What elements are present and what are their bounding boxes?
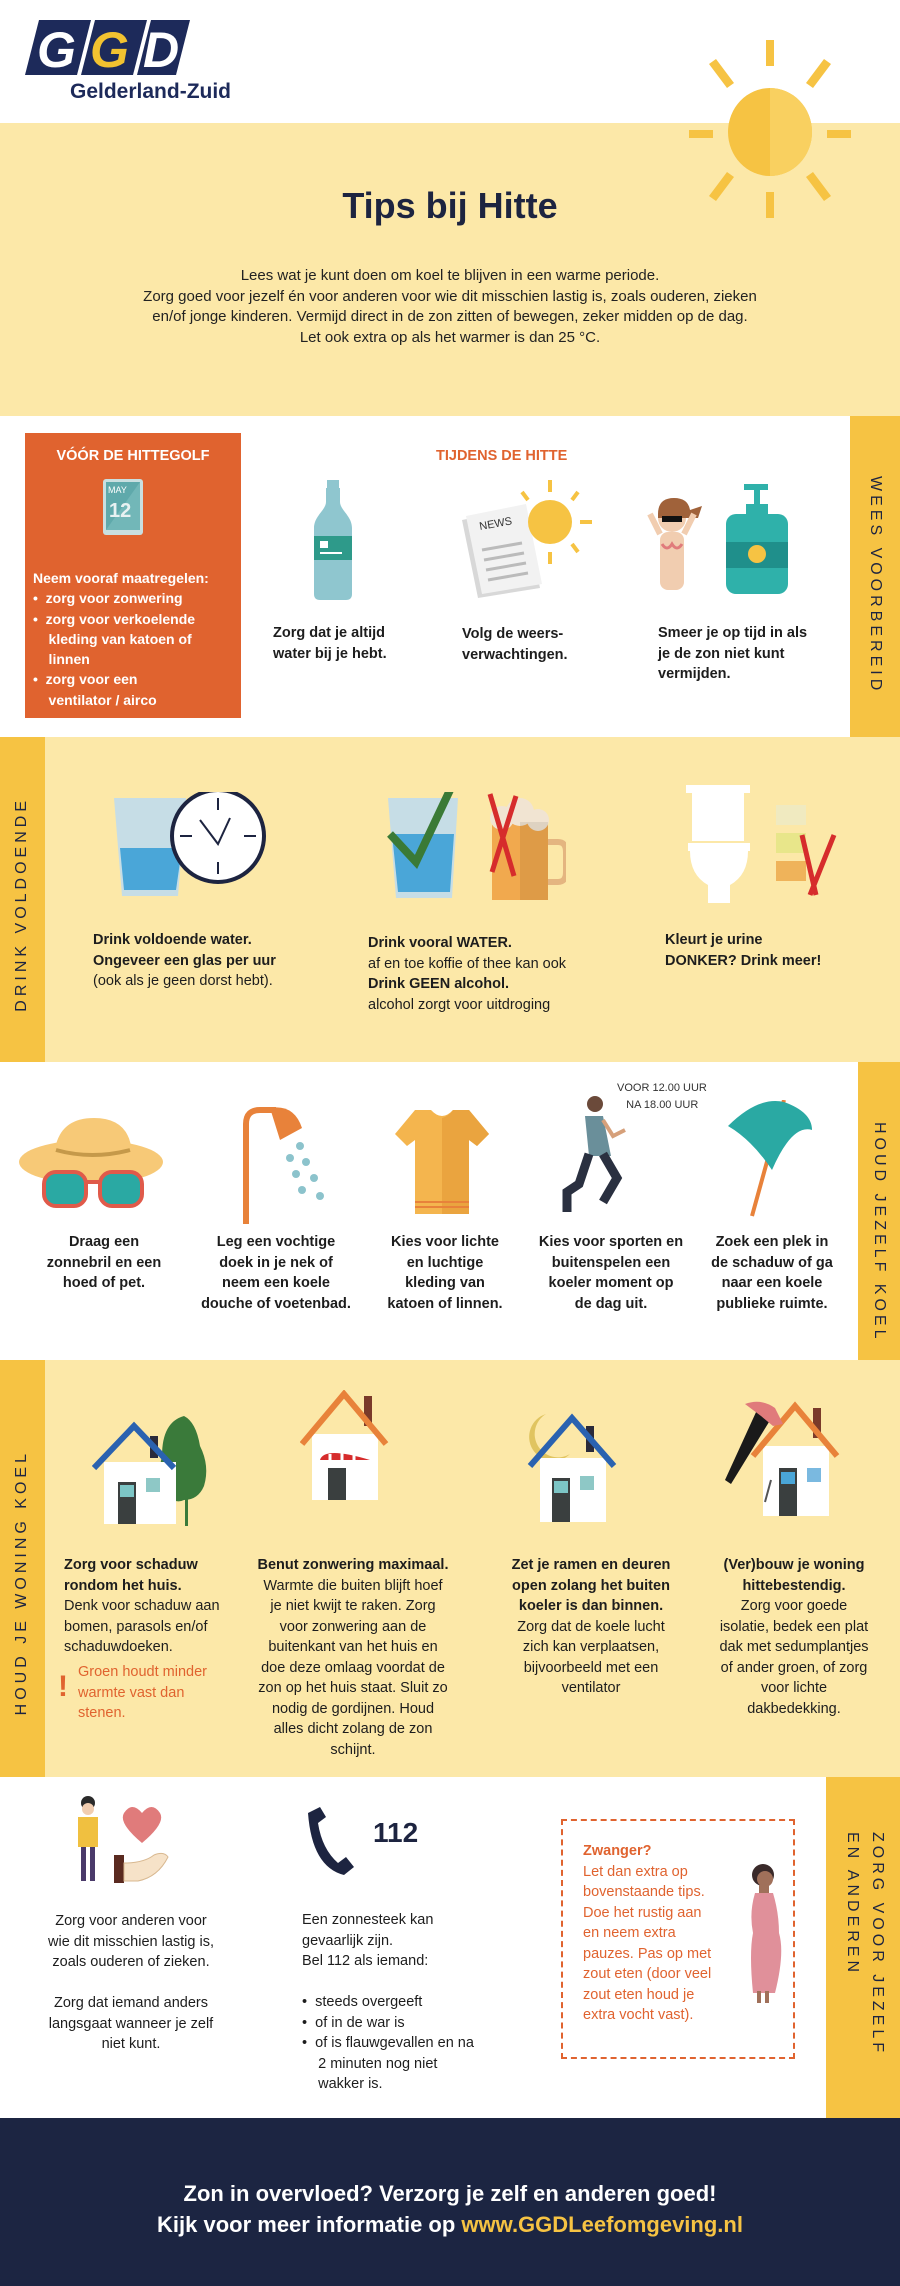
caption: kleding: katoen of linnen. — [387, 1296, 503, 1312]
caption: zonwering: je niet kwijt te raken. Zorg — [270, 1598, 436, 1614]
caption: glas per uur: Ongeveer een glas per uur — [93, 952, 276, 968]
side bar: drink voldoende: DRINK VOLDOENDE — [13, 797, 30, 1012]
caption: verbouw: of ander groen, of zorg — [721, 1660, 867, 1676]
icon: house with moon — [528, 1414, 616, 1522]
caption: zonnebril: hoed of pet. — [63, 1275, 145, 1291]
caption: schaduw rondom huis: Denk voor schaduw aan — [64, 1598, 220, 1614]
caption: verbouw: isolatie, bedek een plat — [720, 1618, 868, 1634]
caption: zonnesteek 112: wakker is. — [318, 2076, 383, 2092]
caption: zonnesteek 112: 2 minuten nog niet — [318, 2056, 437, 2072]
caption: ramen open: Zorg dat de koele lucht — [517, 1618, 665, 1634]
caption: zonwering: zon op het huis staat. Sluit zo — [258, 1680, 448, 1696]
caption: water not alcohol — [368, 935, 566, 1012]
caption: zonwering: nodig de gordijnen. Houd — [272, 1700, 434, 1716]
caption: schaduw rondom huis: schaduwdoeken. — [64, 1639, 173, 1655]
caption: zonwering: schijnt. — [330, 1742, 376, 1758]
caption: zonwering: buitenkant van het huis en — [268, 1639, 438, 1655]
caption: insmeren: vermijden. — [658, 666, 731, 682]
caption: schaduw rondom huis — [64, 1557, 220, 1655]
side bar: zorg voor jezelf en anderen: EN ANDEREN — [844, 1832, 861, 1976]
panel: voor de hittegolf: linnen — [49, 651, 90, 667]
side bar: wees voorbereid: WEES VOORBEREID — [867, 476, 884, 694]
caption: ramen open: ventilator — [562, 1680, 620, 1696]
icon: t-shirt — [395, 1110, 489, 1214]
callout: zwanger: zout eten (door veel — [583, 1966, 711, 1982]
side bar: houd jezelf koel: HOUD JEZELF KOEL — [871, 1122, 888, 1342]
icon: house with awning — [300, 1390, 388, 1500]
caption: zonwering — [258, 1557, 448, 1758]
heading: tijdens de hitte: TIJDENS DE HITTE — [436, 448, 567, 464]
side bar: houd je woning koel — [0, 1360, 45, 1777]
callout: zwanger: extra vocht vast). — [583, 2007, 693, 2023]
callout: groen houdt minder warmte vast: warmte vast dan — [78, 1684, 184, 1700]
section: wees voorbereid — [25, 416, 900, 737]
caption: kleding: kleding van — [405, 1275, 485, 1291]
callout: zwanger — [561, 1819, 795, 2059]
caption: vochtige doek: doek in je nek of — [219, 1254, 333, 1270]
panel: voor de hittegolf — [25, 433, 241, 718]
caption: kleding: Kies voor lichte — [391, 1234, 499, 1250]
icon: pregnant woman — [743, 1863, 785, 2007]
caption: water not alcohol: alcohol zorgt voor uitdroging — [368, 996, 550, 1012]
caption: ramen open: bijvoorbeeld met een — [524, 1660, 658, 1676]
caption: ramen open — [512, 1557, 670, 1696]
caption: schaduw: publieke ruimte. — [716, 1296, 828, 1312]
footer: Kijk voor meer informatie op www.GGDLeefomgeving.nl — [157, 2212, 743, 2237]
caption: sporten — [539, 1234, 683, 1312]
caption: kleding: en luchtige — [407, 1254, 483, 1270]
icon: phone 112: 112 — [373, 1817, 418, 1848]
caption: zonnebril — [47, 1234, 161, 1291]
caption: glas per uur: Drink voldoende water. — [93, 932, 252, 948]
caption: zorg voor anderen: Zorg voor anderen voor — [55, 1913, 207, 1929]
panel: voor de hittegolf: Neem vooraf maatregelen: — [33, 570, 209, 586]
intro text: Zorg goed voor jezelf én voor anderen voor wie dit misschien lastig is, zoals ouderen, zieken — [143, 288, 757, 305]
caption: vochtige doek: neem een koele — [222, 1275, 330, 1291]
header: logo: Gelderland-Zuid — [70, 80, 231, 103]
icon: phone 112 — [308, 1807, 418, 1875]
icon: hat and sunglasses — [19, 1118, 163, 1208]
intro band — [0, 123, 900, 416]
caption: ramen open: open zolang het buiten — [512, 1578, 670, 1594]
side bar: zorg voor jezelf en anderen — [826, 1777, 900, 2118]
icon: water check and beer — [387, 792, 566, 900]
callout: zwanger: pauzes. Pas op met — [583, 1946, 711, 1962]
intro text: Lees wat je kunt doen om koel te blijven in een warme periode. — [241, 267, 659, 284]
caption: zonnesteek 112: gevaarlijk zijn. — [302, 1932, 393, 1948]
panel: voor de hittegolf: kleding van katoen of — [49, 631, 192, 647]
caption: vochtige doek: Leg een vochtige — [217, 1234, 335, 1250]
callout: zwanger: bovenstaande tips. — [583, 1884, 705, 1900]
section: zorg voor jezelf en anderen — [48, 1777, 900, 2118]
caption: water not alcohol: af en toe koffie of thee kan ook — [368, 956, 566, 972]
caption: schaduw: de schaduw of ga — [711, 1254, 833, 1270]
intro text: Let ook extra op als het warmer is dan 25 °C. — [300, 329, 600, 346]
icon: newspaper and sun — [462, 480, 592, 598]
caption: glas per uur — [93, 932, 276, 989]
caption: zorg voor anderen: langsgaat wanneer je zelf — [49, 2016, 213, 2032]
icon: shower — [243, 1107, 324, 1224]
intro text: en/of jonge kinderen. Vermijd direct in de zon zitten of bewegen, zeker midden op de dag. — [152, 308, 748, 325]
section: houd je woning koel — [0, 1360, 900, 1777]
footer — [0, 2118, 900, 2286]
caption: sporten: de dag uit. — [575, 1296, 647, 1312]
callout: zwanger: Zwanger? — [583, 1843, 651, 1859]
caption: verbouw: dakbedekking. — [747, 1700, 841, 1716]
intro text — [143, 267, 757, 346]
caption: schaduw rondom huis: bomen, parasols en/of — [64, 1618, 207, 1634]
caption: ramen open: zich kan verplaatsen, — [523, 1639, 659, 1655]
icon: calendar: MAY — [108, 485, 127, 495]
header: logo — [25, 20, 231, 103]
icon: house with tree — [92, 1416, 206, 1526]
caption: glas per uur: (ook als je geen dorst hebt). — [93, 973, 273, 989]
icon: sun — [689, 40, 851, 218]
caption: sporten: koeler moment op — [549, 1275, 673, 1291]
title: Tips bij Hitte — [342, 185, 558, 226]
caption: urine — [665, 932, 821, 968]
icon: person with heart in hand — [78, 1796, 168, 1883]
callout: zwanger: zout eten houd je — [583, 1986, 694, 2002]
caption: zonwering: voor zonwering aan de — [280, 1618, 426, 1634]
caption: verbouw — [719, 1557, 869, 1716]
side bar: houd jezelf koel — [858, 1062, 900, 1360]
icon: house with hammer — [725, 1402, 840, 1516]
caption: ramen open: koeler is dan binnen. — [519, 1598, 663, 1614]
caption: zonnesteek 112: Een zonnesteek kan — [302, 1912, 433, 1928]
caption: ramen open: Zet je ramen en deuren — [512, 1557, 670, 1573]
caption: water: water bij je hebt. — [273, 646, 387, 662]
caption: schaduw: Zoek een plek in — [716, 1234, 828, 1250]
caption: schaduw: naar een koele — [722, 1275, 822, 1291]
side bar: zorg voor jezelf en anderen: ZORG VOOR JEZELF — [869, 1832, 886, 2056]
callout: groen houdt minder warmte vast: Groen houdt minder — [78, 1664, 207, 1680]
caption: zonnesteek 112: • of is flauwgevallen en na — [302, 2035, 474, 2051]
caption: zorg voor anderen — [41, 1911, 221, 2054]
side bar: houd je woning koel: HOUD JE WONING KOEL — [13, 1450, 30, 1715]
caption: zonnesteek 112 — [302, 1910, 522, 2094]
callout: groen houdt minder warmte vast — [58, 1664, 207, 1721]
callout: zwanger: Let dan extra op — [583, 1864, 688, 1880]
caption: water — [273, 625, 387, 662]
caption: zonnesteek 112: • of in de war is — [302, 2014, 405, 2030]
section: houd jezelf koel — [19, 1062, 900, 1360]
callout: zwanger: Doe het rustig aan — [583, 1904, 702, 1920]
caption: weersverwachtingen: verwachtingen. — [462, 646, 568, 662]
caption: schaduw — [711, 1234, 833, 1312]
panel: voor de hittegolf: • zorg voor zonwering — [33, 590, 183, 606]
caption: water not alcohol: Drink vooral WATER. — [368, 935, 512, 951]
caption: insmeren: Smeer je op tijd in als — [658, 625, 807, 641]
icon: parasol — [728, 1100, 812, 1216]
caption: zonnebril: zonnebril en een — [47, 1254, 161, 1270]
callout: groen houdt minder warmte vast: stenen. — [78, 1705, 126, 1721]
caption: urine: Kleurt je urine — [665, 932, 762, 948]
caption: verbouw: dak met sedumplantjes — [719, 1639, 869, 1655]
caption: schaduw rondom huis: rondom het huis. — [64, 1578, 182, 1594]
panel: voor de hittegolf: ventilator / airco — [49, 692, 157, 708]
caption: zonnebril: Draag een — [69, 1234, 139, 1250]
caption: vochtige doek: douche of voetenbad. — [201, 1296, 351, 1312]
caption: zonwering: doe deze omlaag voordat de — [261, 1660, 445, 1676]
caption: kleding — [387, 1234, 503, 1312]
icon: calendar — [103, 479, 143, 535]
icon: runner with times — [562, 1082, 707, 1212]
side bar: wees voorbereid — [850, 416, 900, 737]
caption: water not alcohol: Drink GEEN alcohol. — [368, 976, 509, 992]
callout: zwanger: en neem extra — [583, 1925, 676, 1941]
panel: voor de hittegolf: • zorg voor verkoelende — [33, 611, 195, 627]
caption: weersverwachtingen: Volg de weers- — [462, 626, 563, 642]
icon: runner with times: NA 18.00 UUR — [626, 1099, 698, 1111]
caption: zonnesteek 112: • steeds overgeeft — [302, 1994, 422, 2010]
caption: weersverwachtingen — [462, 626, 568, 662]
caption: schaduw rondom huis: Zorg voor schaduw — [64, 1557, 198, 1573]
icon: water bottle — [314, 480, 352, 600]
callout: groen houdt minder warmte vast: ! — [58, 1670, 68, 1703]
caption: sporten: Kies voor sporten en — [539, 1234, 683, 1250]
caption: water: Zorg dat je altijd — [273, 625, 385, 641]
icon: glass and clock — [114, 792, 266, 896]
icon: woman and sunscreen — [648, 484, 788, 594]
caption: verbouw: Zorg voor goede — [741, 1598, 847, 1614]
panel: voor de hittegolf: VÓÓR DE HITTEGOLF — [56, 448, 210, 464]
caption: zonwering: alles dicht zolang de zon — [274, 1721, 432, 1737]
footer: Zon in overvloed? Verzorg je zelf en anderen goed! — [184, 2181, 716, 2206]
icon: toilet and urine colours — [686, 785, 836, 903]
panel: voor de hittegolf: • zorg voor een — [33, 671, 137, 687]
caption: zorg voor anderen: niet kunt. — [102, 2036, 160, 2052]
caption: zorg voor anderen: Zorg dat iemand anders — [54, 1995, 208, 2011]
caption: zonwering: Benut zonwering maximaal. — [258, 1557, 448, 1573]
caption: sporten: buitenspelen een — [552, 1254, 670, 1270]
caption: vochtige doek — [201, 1234, 351, 1312]
caption: verbouw: hittebestendig. — [742, 1578, 846, 1594]
caption: zorg voor anderen: zoals ouderen of zieken. — [52, 1954, 210, 1970]
caption: zorg voor anderen: wie dit misschien lastig is, — [48, 1934, 214, 1950]
side bar: drink voldoende — [0, 737, 45, 1062]
caption: zonnesteek 112: Bel 112 als iemand: — [302, 1953, 428, 1969]
icon: newspaper and sun: NEWS — [478, 515, 513, 533]
caption: zonwering: Warmte die buiten blijft hoef — [263, 1578, 443, 1594]
caption: insmeren — [658, 625, 807, 682]
caption: verbouw: (Ver)bouw je woning — [724, 1557, 864, 1573]
icon: calendar: 12 — [109, 500, 131, 522]
icon: runner with times: VOOR 12.00 UUR — [617, 1082, 707, 1094]
section: drink voldoende — [0, 737, 900, 1062]
caption: urine: DONKER? Drink meer! — [665, 952, 821, 968]
caption: insmeren: je de zon niet kunt — [658, 646, 784, 662]
caption: verbouw: voor lichte — [761, 1680, 827, 1696]
